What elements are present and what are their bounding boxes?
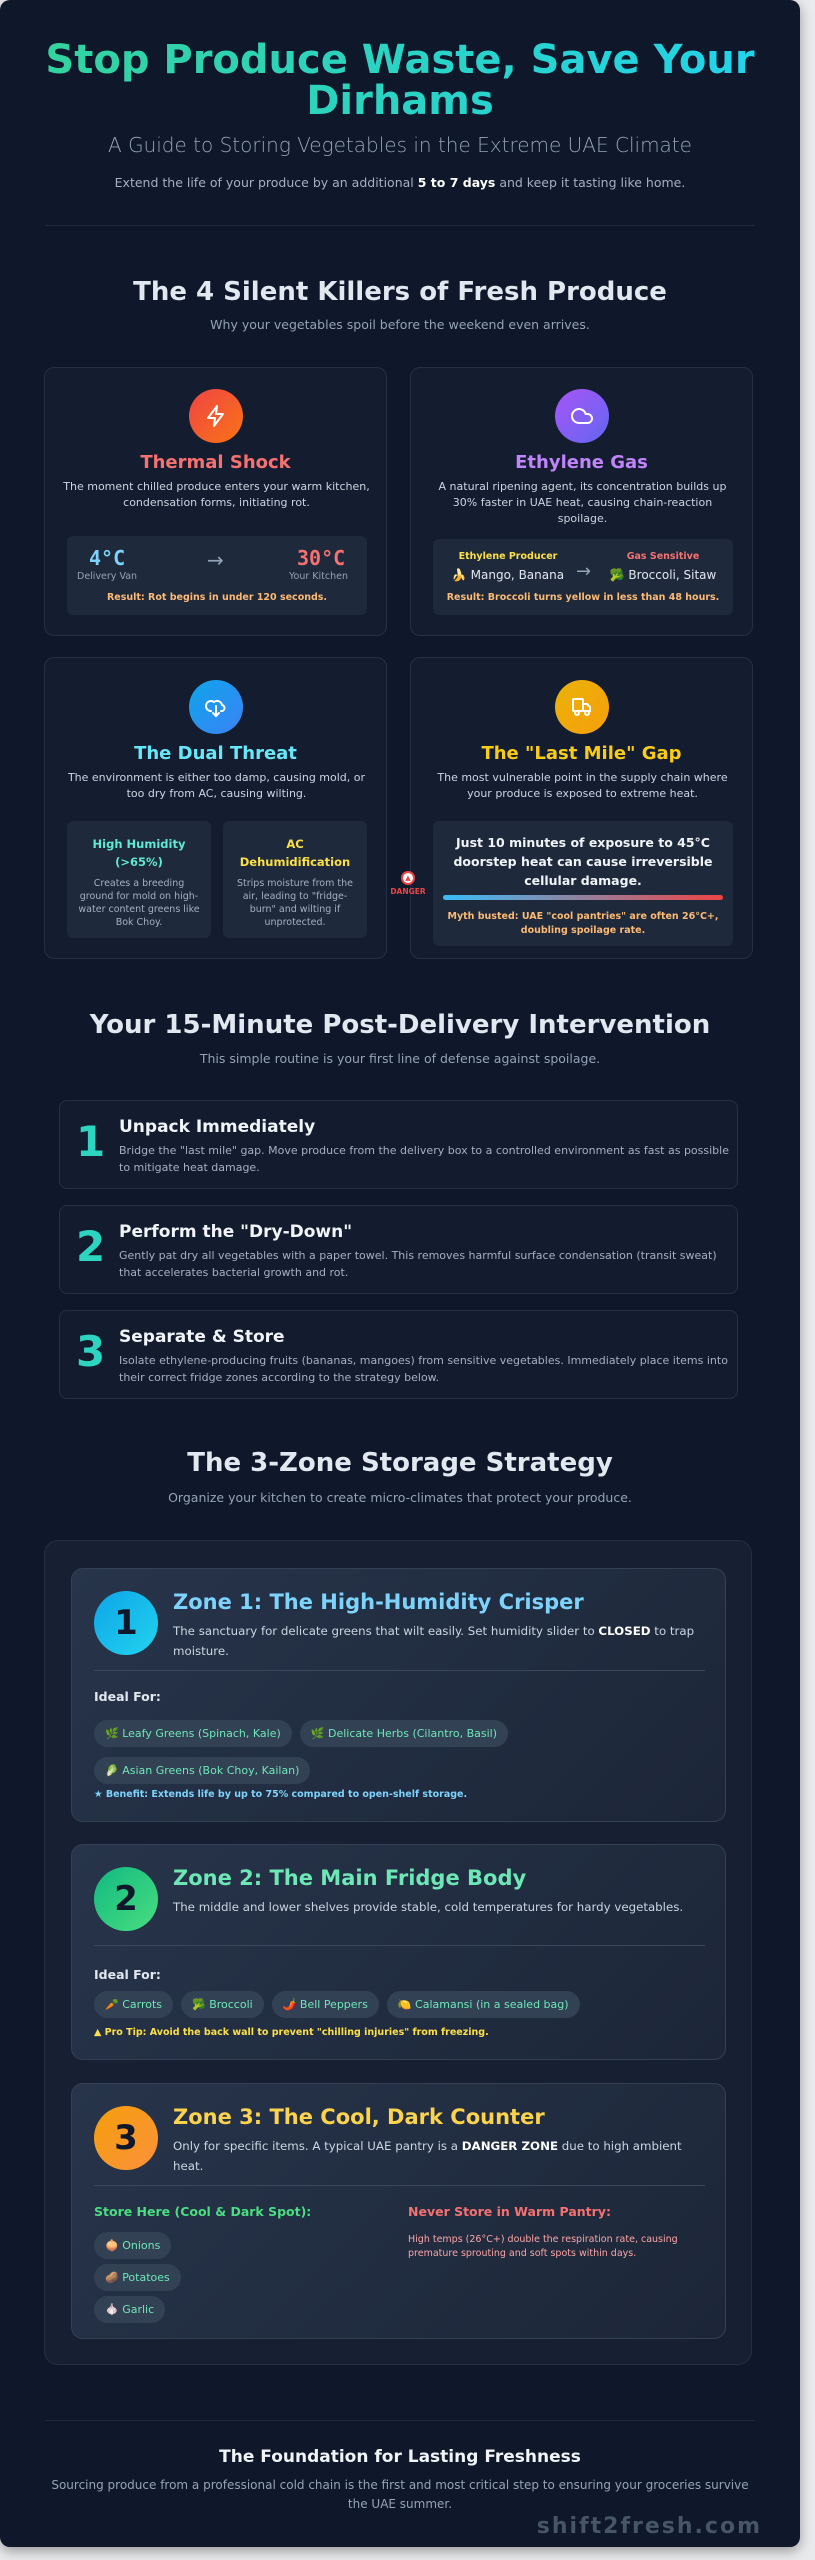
sub-box: AC dehumidification: AC	[286, 837, 304, 851]
zone 3: Never Store in Warm Pantry:	[408, 2204, 611, 2219]
zone 2: 🥕 Carrots	[105, 1998, 162, 2011]
panel: thermal shock	[44, 367, 387, 636]
tagline: Extend the life of your produce by an additional 5 to 7 days and keep it tasting like home.	[115, 175, 685, 190]
icon: danger marker: ▲	[405, 874, 411, 882]
zone 3: 🧄 Garlic	[105, 2303, 154, 2316]
step 1: Unpack Immediately	[119, 1117, 315, 1137]
step 3	[59, 1310, 738, 1399]
sub-box: high humidity: Creates a breeding ground for mold on high-water content greens like Bok Choy.	[78, 878, 200, 928]
step 2: 2	[76, 1222, 105, 1271]
sub-box: AC dehumidification: Strips moisture from the air, leading to "fridge-burn" and wilting if unprotected.	[237, 878, 353, 928]
temperature box: 4°C	[89, 546, 125, 570]
brand: shift2fresh.com	[537, 2514, 762, 2539]
description: The moment chilled produce enters your warm kitchen, condensation forms, initiating rot.	[63, 480, 370, 509]
zone 2: The middle and lower shelves provide stable, cold temperatures for hardy vegetables.	[173, 1900, 683, 1914]
step 2: Gently pat dry all vegetables with a paper towel. This removes harmful surface condensation (transit sweat) that accelerates bacterial growth and rot.	[119, 1249, 717, 1279]
panel: zones container	[44, 1540, 752, 2365]
icon: danger marker	[390, 871, 426, 896]
sub-box: high humidity: High Humidity (>65%)	[93, 837, 185, 869]
heading: 4 silent killers: The 4 Silent Killers of Fresh Produce	[133, 277, 667, 307]
step 1	[59, 1100, 738, 1189]
zone 3: 🥔 Potatoes	[105, 2271, 170, 2284]
zone 2: ▲ Pro Tip: Avoid the back wall to prevent "chilling injuries" from freezing.	[94, 2027, 489, 2038]
heading: 3-zone strategy: The 3-Zone Storage Strategy	[187, 1448, 613, 1478]
producer/sensitive box: 🍌 Mango, Banana	[452, 568, 564, 582]
zone 3: 🧅 Onions	[105, 2239, 160, 2252]
step 1: Bridge the "last mile" gap. Move produce from the delivery box to a controlled environment as fast as possible to mitigate heat damage.	[119, 1144, 729, 1174]
producer/sensitive box: →	[576, 561, 591, 582]
zone 2: 🥦 Broccoli	[192, 1998, 253, 2011]
zone 1	[71, 1568, 726, 1822]
producer/sensitive box	[433, 539, 733, 615]
gradient bar	[443, 895, 723, 900]
section subtitle: Why your vegetables spoil before the weekend even arrives.	[210, 317, 590, 332]
zone 2: 🌶️ Bell Peppers	[283, 1998, 368, 2011]
card title: Ethylene Gas	[515, 452, 648, 473]
zone 1: 1	[114, 1603, 138, 1643]
card title: Thermal Shock	[140, 452, 291, 473]
heat exposure box: Myth busted: UAE "cool pantries" are often 26°C+, doubling spoilage rate.	[447, 911, 719, 936]
description: A natural ripening agent, its concentration builds up 30% faster in UAE heat, causing chain-reaction spoilage.	[439, 480, 726, 525]
producer/sensitive box: 🥦 Broccoli, Sitaw	[610, 568, 716, 582]
temperature box: Your Kitchen	[289, 571, 348, 582]
temperature box: Delivery Van	[77, 571, 137, 582]
panel: last mile gap	[410, 657, 753, 959]
zone 3: 3	[114, 2118, 138, 2158]
zone 1: Zone 1: The High-Humidity Crisper	[173, 1590, 584, 1614]
icon: cloud	[554, 389, 608, 443]
section subtitle: This simple routine is your first line of defense against spoilage.	[200, 1051, 600, 1066]
zone 1: 🥬 Asian Greens (Bok Choy, Kailan)	[105, 1764, 299, 1777]
panel: ethylene gas	[410, 367, 753, 636]
zone 3: High temps (26°C+) double the respiration rate, causing premature sprouting and soft spots within days.	[408, 2234, 678, 2259]
icon: lightning	[188, 389, 242, 443]
producer/sensitive box: Ethylene Producer	[459, 551, 557, 562]
heading: intervention: Your 15-Minute Post-Delivery Intervention	[90, 1010, 710, 1040]
title: Stop Produce Waste, Save Your	[45, 37, 755, 83]
zone 1: 🌿 Leafy Greens (Spinach, Kale)	[105, 1727, 281, 1740]
section subtitle: Organize your kitchen to create micro-climates that protect your produce.	[168, 1490, 632, 1505]
zone 2: 🍋 Calamansi (in a sealed bag)	[398, 1998, 569, 2011]
card title: The Dual Threat	[134, 743, 297, 764]
subtitle: A Guide to Storing Vegetables in the Extreme UAE Climate	[108, 133, 692, 157]
zone 1: 🌿 Delicate Herbs (Cilantro, Basil)	[311, 1727, 497, 1740]
zone 2: Ideal For:	[94, 1967, 161, 1982]
icon: truck	[554, 680, 608, 734]
step 1: 1	[76, 1117, 105, 1166]
sub-box: AC dehumidification	[223, 821, 367, 938]
card title: The "Last Mile" Gap	[481, 743, 682, 764]
step 3: Isolate ethylene-producing fruits (bananas, mangoes) from sensitive vegetables. Immediately place items into their correct fridge zones according to the strategy below.	[119, 1354, 728, 1384]
heat exposure box	[433, 821, 733, 946]
description: The environment is either too damp, causing mold, or too dry from AC, causing wilting.	[68, 771, 365, 800]
description: The most vulnerable point in the supply chain where your produce is exposed to extreme heat.	[437, 771, 728, 800]
icon: cloud download	[188, 680, 242, 734]
zone 3: Store Here (Cool & Dark Spot):	[94, 2204, 311, 2219]
step 2: Perform the "Dry-Down"	[119, 1222, 352, 1242]
temperature box: Result: Rot begins in under 120 seconds.	[107, 592, 327, 603]
step 3: Separate & Store	[119, 1327, 285, 1347]
heat exposure box: Just 10 minutes of exposure to 45°C doorstep heat can cause irreversible cellular damage.	[453, 835, 713, 888]
zone 2: 2	[114, 1879, 138, 1919]
zone 2: Zone 2: The Main Fridge Body	[173, 1866, 526, 1890]
temperature box: 30°C	[297, 546, 345, 570]
footer text: Sourcing produce from a professional cold chain is the first and most critical step to ensuring your groceries survive the UAE summer.	[51, 2478, 749, 2511]
sub-box: AC dehumidification: Dehumidification	[240, 855, 350, 869]
zone 1: ★ Benefit: Extends life by up to 75% compared to open-shelf storage.	[94, 1789, 467, 1800]
title: Dirhams	[306, 78, 494, 124]
producer/sensitive box: Result: Broccoli turns yellow in less than 48 hours.	[447, 592, 719, 603]
temperature box: →	[207, 548, 224, 572]
zone 1: The sanctuary for delicate greens that wilt easily. Set humidity slider to CLOSED to trap moisture.	[173, 1624, 694, 1658]
zone 2	[71, 1844, 726, 2060]
zone 1: Ideal For:	[94, 1689, 161, 1704]
zone 3: Only for specific items. A typical UAE pantry is a DANGER ZONE due to high ambient heat.	[173, 2139, 682, 2173]
footer heading: The Foundation for Lasting Freshness	[219, 2447, 581, 2467]
step 3: 3	[76, 1327, 105, 1376]
sub-box: high humidity	[67, 821, 211, 938]
zone 3	[71, 2083, 726, 2339]
step 2	[59, 1205, 738, 1294]
title	[0, 40, 800, 122]
panel: dual threat	[44, 657, 387, 959]
temperature box	[67, 536, 367, 615]
icon: danger marker: DANGER	[390, 887, 426, 896]
producer/sensitive box: Gas Sensitive	[627, 551, 699, 562]
zone 3: Zone 3: The Cool, Dark Counter	[173, 2105, 545, 2129]
